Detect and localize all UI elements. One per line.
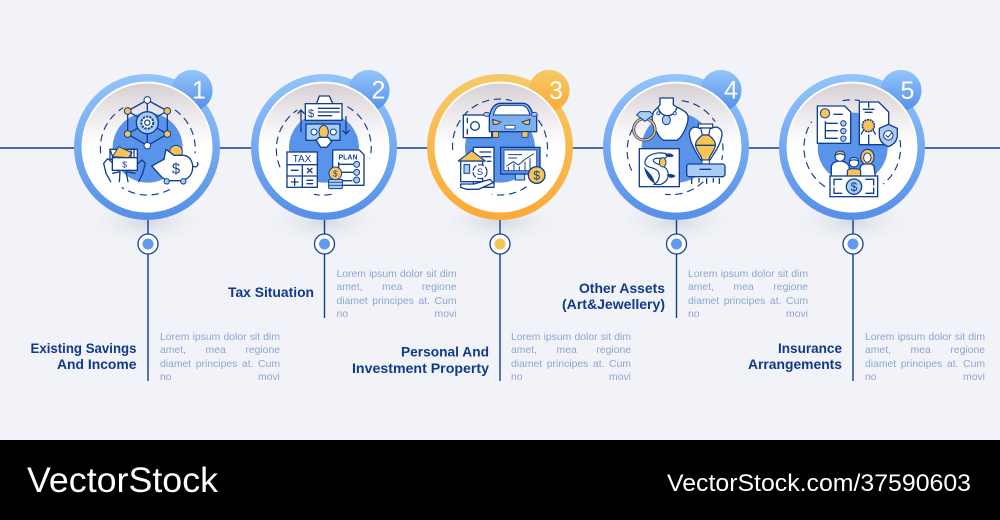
icon: personal and investment property — [453, 99, 547, 195]
heading: tax situation: Tax Situation — [228, 284, 314, 300]
icon: tax situation: TAX — [293, 154, 312, 165]
text block: step 2 description: Lorem ipsum dolor sit dim — [336, 269, 456, 280]
heading: existing savings and income: Existing Savings — [30, 340, 137, 356]
icon: savings and income: $ — [122, 159, 127, 169]
horizontal timeline line — [0, 147, 1000, 149]
icon: tax situation: PLAN — [338, 154, 358, 161]
step 2 node: 2 — [372, 76, 385, 104]
footer logo text: VectorStock — [27, 461, 219, 500]
text block: step 5 description — [865, 332, 985, 383]
step 1 node — [74, 70, 220, 381]
heading: personal and investment property: Personal And — [401, 344, 489, 360]
step 4 node: 4 — [724, 76, 738, 104]
text block: step 3 description: Lorem ipsum dolor sit dim — [511, 332, 631, 343]
icon: tax situation — [276, 96, 371, 195]
text block: step 5 description: diamet principes at. Cum — [865, 359, 985, 370]
text block: step 1 description — [160, 332, 280, 383]
step 5 node: 5 — [901, 77, 914, 105]
heading: other assets — [562, 280, 665, 312]
step 3 node — [427, 70, 573, 381]
text block: step 2 description — [336, 269, 456, 320]
text block: step 4 description: amet, mea regione — [688, 282, 808, 293]
icon: personal and investment property: $ — [533, 168, 540, 182]
text block: step 1 description: Lorem ipsum dolor sit dim — [160, 332, 280, 343]
text block: step 3 description: diamet principes at. Cum — [511, 359, 631, 370]
step 1 node: 1 — [192, 76, 206, 104]
icon: savings and income: $ — [172, 162, 180, 178]
text block: step 5 description: amet, mea regione — [865, 345, 985, 356]
heading: personal and investment property: Investment Property — [352, 360, 489, 376]
step 3 node: 3 — [549, 77, 563, 105]
text block: step 1 description: amet, mea regione — [160, 345, 280, 356]
icon: insurance arrangements: $ — [851, 180, 858, 194]
footer black band — [0, 440, 1000, 520]
text block: step 5 description: Lorem ipsum dolor sit dim — [865, 332, 985, 343]
icon: tax situation: $ — [333, 169, 338, 178]
text block: step 3 description: no movi — [511, 372, 631, 383]
step 2 node — [251, 70, 397, 318]
heading: existing savings and income — [30, 340, 137, 372]
heading: insurance arrangements — [748, 340, 842, 372]
heading: other assets: (Art&Jewellery) — [562, 296, 665, 312]
icon: tax situation: $ — [308, 108, 315, 120]
heading: insurance arrangements: Arrangements — [748, 356, 842, 372]
icon: other assets, art and jewellery — [627, 98, 725, 195]
text block: step 3 description: amet, mea regione — [511, 345, 631, 356]
text block: step 4 description: diamet principes at. Cum — [688, 296, 808, 307]
text block: step 1 description: no movi — [160, 372, 280, 383]
text block: step 5 description: no movi — [865, 372, 985, 383]
heading: other assets: Other Assets — [579, 280, 665, 296]
icon: personal and investment property: S — [477, 167, 483, 177]
text block: step 2 description: amet, mea regione — [336, 282, 456, 293]
heading: personal and investment property — [352, 344, 489, 376]
icon: savings and income — [100, 97, 198, 195]
footer image id text: VectorStock.com/37590603 — [667, 470, 971, 497]
step 4 node — [603, 70, 749, 318]
text block: step 4 description: Lorem ipsum dolor sit dim — [688, 269, 808, 280]
step 5 node — [779, 70, 925, 381]
text block: step 4 description: no movi — [688, 309, 808, 320]
text block: step 4 description — [688, 269, 808, 320]
text block: step 2 description: diamet principes at. Cum — [336, 296, 456, 307]
text block: step 1 description: diamet principes at. Cum — [160, 359, 280, 370]
text block: step 2 description: no movi — [336, 309, 456, 320]
heading: insurance arrangements: Insurance — [778, 340, 842, 356]
text block: step 3 description — [511, 332, 631, 383]
icon: insurance arrangements — [804, 100, 901, 197]
heading: existing savings and income: And Income — [57, 356, 137, 372]
